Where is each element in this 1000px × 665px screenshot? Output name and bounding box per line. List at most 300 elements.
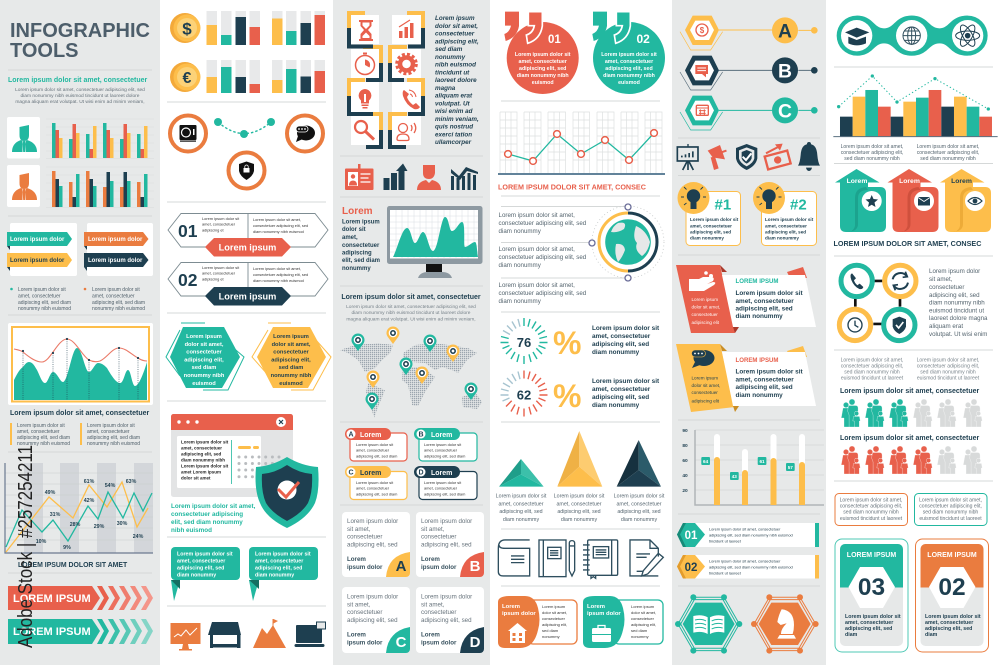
chart heading: Lorem ipsum dolor sit amet, consectetuer xyxy=(10,410,150,417)
arrow card: yellow xyxy=(940,169,991,232)
tip card #1: Lorem ipsum dolor sit xyxy=(690,217,738,222)
vertical bar chart: 40 xyxy=(682,473,688,479)
row A: A xyxy=(778,21,792,42)
tag A xyxy=(345,428,407,461)
text block 2: Lorem ipsum dolor sit amet, xyxy=(498,246,575,253)
pyramid captions: Lorem ipsum dolor sit xyxy=(496,494,546,500)
outlined note: teal xyxy=(914,494,987,526)
hexagon text: yellow: adipiscing elit, xyxy=(271,358,311,364)
letter card D: ipsum dolor xyxy=(421,640,457,646)
text block 1: diam nonummy xyxy=(498,228,542,235)
note text right: nonummy nibh euismod xyxy=(87,441,140,447)
note text left: adipiscing elit, sed diam xyxy=(17,435,70,441)
callout card: orange: ipsum dolor xyxy=(502,611,536,617)
tag A: Lorem xyxy=(360,432,381,439)
monitor side text: dolor sit xyxy=(342,227,366,233)
monitor side text: consectetuer xyxy=(342,243,380,249)
quote circle 02: adipiscing elit, sed xyxy=(605,66,653,72)
letter card D: sit amet, xyxy=(421,602,445,608)
icon: bulb xyxy=(756,187,782,209)
letter card D: adipiscing elit, sed xyxy=(421,617,472,624)
ribbon banner: yellow: dolor sit amet, xyxy=(692,383,720,388)
letter card D: consectetuer xyxy=(421,609,456,616)
icon: shield check xyxy=(893,317,906,334)
step row 01: tincidunt ut laoreet xyxy=(709,538,742,544)
number card 03: adipiscing elit, sed xyxy=(845,626,892,632)
panel: column 1 background xyxy=(0,0,160,665)
callout card: orange: Lorem xyxy=(502,604,520,610)
ribbon: orange: Lorem ipsum dolor xyxy=(88,237,143,243)
ribbon: teal: Lorem ipsum dolor xyxy=(10,237,65,243)
icon: megaphone xyxy=(708,145,727,170)
number card 02: LOREM IPSUM xyxy=(927,552,977,559)
ribbon banner: red: Lorem ipsum xyxy=(692,297,718,302)
letter card D: D xyxy=(470,634,481,651)
icon: hand xyxy=(689,271,715,291)
browser window: amet Lorem ipsum xyxy=(181,470,221,474)
hexagon text: yellow: consectetuer xyxy=(273,350,309,356)
globe with leader lines xyxy=(501,204,664,281)
network text: adipiscing elit, sed xyxy=(929,292,980,299)
letter card C: sit amet, xyxy=(347,602,371,608)
step row 01: Lorem ipsum dolor sit amet, consectetuer xyxy=(709,526,780,532)
icon: book xyxy=(498,540,530,576)
text block 3: consectetuer adipiscing elit, sed xyxy=(498,290,587,297)
red heading: LOREM IPSUM DOLOR SIT AMET, CONSEC xyxy=(498,182,646,192)
icon: red person xyxy=(417,165,441,190)
pyramid captions: amet, consectetuer xyxy=(498,502,544,508)
pyramid captions: diam nonummy xyxy=(621,517,657,523)
ribbon banner: yellow xyxy=(676,344,816,412)
monitor side heading: Lorem xyxy=(342,206,373,217)
map text: diam nonummy nibh euismod tincidunt ut laoreet dolore xyxy=(351,310,471,316)
tag C: C xyxy=(348,470,354,476)
pyramid captions: adipiscing elit, sed xyxy=(617,509,661,515)
icon: navy chart xyxy=(451,167,478,190)
icon circle: lock shield xyxy=(228,152,264,188)
tag B: amet, consectetuer xyxy=(424,448,458,452)
ribbon labels panel xyxy=(7,223,153,276)
letter card D xyxy=(416,587,484,653)
bar gauges row 2 xyxy=(206,60,325,93)
ribbon banner: red xyxy=(676,265,816,333)
circle network xyxy=(839,265,916,341)
quote circle 01: Lorem ipsum dolor sit xyxy=(515,52,571,58)
line chart: 9% xyxy=(63,545,71,551)
tip card #1: diam nonummy xyxy=(690,236,724,240)
bullet text: teal: adipiscing elit, sed diam xyxy=(18,300,71,306)
quote circle 02: euismod xyxy=(618,80,640,86)
outlined note: teal: consectetuer adipiscing elit, xyxy=(919,504,982,510)
step label 01: adipiscing et xyxy=(202,228,225,232)
map text: magna aliquam erat volutpat. Ut wisi enim ad minim veniam, xyxy=(346,316,476,322)
tag D: Lorem ipsum dolor sit xyxy=(424,480,461,485)
step label 02: consectetuer adipiscing elit, sed xyxy=(253,272,308,277)
tip card #2: Lorem ipsum dolor sit xyxy=(765,217,813,222)
family heading 2: Lorem ipsum dolor sit amet, consectetuer xyxy=(840,435,980,442)
tip card #1: adipiscing elit, sed xyxy=(690,230,731,235)
world map with pins xyxy=(340,326,482,418)
tag D: Lorem xyxy=(431,470,452,477)
letter card A: sit amet, xyxy=(347,526,371,533)
speech bubble 1: adipiscing elit, sed xyxy=(177,566,224,572)
browser window: dolor sit amet xyxy=(181,476,211,480)
step label 02: Lorem ipsum xyxy=(219,292,276,302)
stat text 1: Lorem ipsum dolor sit xyxy=(592,325,659,332)
letter card C: Lorem ipsum dolor xyxy=(347,594,398,600)
pyramid: navy xyxy=(617,440,661,487)
letter card C: Lorem xyxy=(347,632,366,638)
ribbon banner: red: LOREM IPSUM xyxy=(736,278,778,285)
navy heading: LOREM IPSUM DOLOR SIT AMET, CONSEC xyxy=(834,239,981,248)
callout card: orange: consectetuer xyxy=(542,616,566,621)
letter card D: Lorem ipsum dolor xyxy=(421,594,472,600)
sunburst 76: 76 xyxy=(517,335,531,350)
tag C: amet, consectetuer xyxy=(356,486,390,490)
panel: column 3 background xyxy=(333,0,490,665)
icon: bars with arrow xyxy=(384,164,408,190)
callout card: teal: adipiscing elit, xyxy=(631,622,656,627)
family pictogram row 2 xyxy=(841,446,982,474)
family heading 1: Lorem ipsum dolor sit amet, consectetuer xyxy=(840,388,980,395)
browser window: diam nonummy nibh xyxy=(181,458,225,462)
callout card: teal: nonummy xyxy=(631,634,649,639)
tip card #1: #1 xyxy=(714,196,731,214)
monitor side text: nonummy xyxy=(342,266,371,272)
outlined note: orange: consectetuer adipiscing elit, xyxy=(840,504,902,510)
icon: document and pen xyxy=(630,540,663,576)
stat text 1: amet, consectetuer xyxy=(592,333,651,340)
sunburst 76 xyxy=(500,318,548,364)
italic paragraph: adipiscing elit, xyxy=(435,38,479,45)
monitor side text: amet, xyxy=(342,235,358,241)
icon: knight xyxy=(777,609,796,639)
ribbon banner: red: Lorem ipsum dolor sit xyxy=(736,290,803,297)
callout card: teal: ipsum dolor xyxy=(587,611,621,617)
icon: chart monitor xyxy=(170,623,200,650)
icon: rising bars xyxy=(399,20,414,38)
tip card #1 xyxy=(678,182,740,246)
bar chart: orange navy teal xyxy=(46,167,154,208)
area chart card xyxy=(8,323,153,405)
note text left: nonummy nibh euismod xyxy=(17,441,70,447)
ribbon: yellow xyxy=(7,253,72,267)
two column text: Lorem ipsum dolor sit amet, xyxy=(841,358,903,364)
icon: graduation cap xyxy=(845,28,869,45)
note text left xyxy=(10,423,70,447)
arrow banner: teal xyxy=(8,619,153,644)
speech bubble 2: adipiscing elit, sed xyxy=(255,566,302,572)
two column text: sed diam nonummy nibh xyxy=(844,370,900,376)
italic paragraph: aliquam erat xyxy=(435,92,473,100)
icon: id card xyxy=(345,164,374,190)
icon: person speaking xyxy=(397,123,416,140)
stat text 2: diam nonummy xyxy=(592,402,640,409)
step label 01: Lorem ipsum xyxy=(219,242,276,252)
line chart: 61% xyxy=(84,479,95,485)
step label 02: adipiscing et xyxy=(202,276,225,282)
hexagon text: teal: nonummy nibh xyxy=(184,373,225,379)
italic paragraph: magna xyxy=(435,85,456,92)
italic paragraph: nibh euismod xyxy=(435,62,476,68)
monitor chart xyxy=(387,206,482,278)
quote circle 02: diam nonummy nibh xyxy=(603,73,655,79)
number card 02: adipiscing elit, sed xyxy=(925,626,972,632)
callout card: teal: consectetuer xyxy=(631,616,655,621)
hex badge: chess knight xyxy=(751,594,819,654)
line chart heading: LOREM IPSUM DOLOR SIT AMET xyxy=(18,562,128,569)
text block 1: consectetuer adipiscing elit, sed xyxy=(498,220,587,227)
tag C: Lorem ipsum dolor sit xyxy=(356,480,393,485)
italic paragraph: dolor sit amet, xyxy=(435,23,478,30)
note text right: amet, consectetuer xyxy=(87,429,130,435)
icon: mountain flag xyxy=(253,619,286,648)
line chart: 31% xyxy=(50,512,61,518)
letter card C: ipsum dolor xyxy=(347,640,383,646)
pyramid captions: diam nonummy xyxy=(503,517,539,523)
letter card A xyxy=(342,512,410,577)
letter card B: adipiscing elit, sed xyxy=(421,542,472,548)
pyramid captions: adipiscing elit, sed xyxy=(499,509,543,515)
ribbon banner: yellow: LOREM IPSUM xyxy=(736,357,778,364)
italic paragraph: quis nostrud xyxy=(435,124,473,130)
network text: volutpat. Ut wisi enim xyxy=(929,331,987,338)
row B: B xyxy=(778,61,792,82)
note text left: amet, consectetuer xyxy=(17,429,60,435)
quote circle 01: 01 xyxy=(548,34,561,46)
ribbon: teal xyxy=(7,232,72,246)
vertical bar chart: 43 xyxy=(732,474,737,479)
step label 01: Lorem ipsum dolor sit xyxy=(202,216,239,221)
pyramid captions: amet, consectetuer xyxy=(556,502,602,508)
title: INFOGRAPHIC xyxy=(10,20,150,42)
letter card C: C xyxy=(396,634,407,651)
note text right: Lorem ipsum dolor sit xyxy=(87,423,135,429)
quote circle 01: adipiscing elit, sed xyxy=(519,66,566,72)
quote circle 02 xyxy=(592,12,665,94)
percent symbol 1: % xyxy=(553,325,581,361)
network text: laoreet dolore magna xyxy=(929,315,988,322)
bullet text: orange: nonummy nibh euismod xyxy=(92,306,145,312)
step row 01: adipiscing elit, sed diam nonummy nibh euismod xyxy=(709,532,793,538)
quote circle 01: amet, consectetuer xyxy=(519,59,567,65)
icon: notebook and pencil xyxy=(539,540,575,577)
stat text 2: Lorem ipsum dolor sit xyxy=(592,378,659,385)
outlined note: orange: euismod tincidunt ut laoreet xyxy=(840,516,903,522)
callout card: teal xyxy=(583,596,663,648)
outline icons row xyxy=(498,540,663,578)
ribbon: orange xyxy=(84,232,148,246)
italic paragraph: laoreet dolore xyxy=(435,77,477,84)
network text: Lorem ipsum dolor xyxy=(929,268,980,275)
stat text 1: diam nonummy xyxy=(592,349,640,356)
bullet text: teal: Lorem ipsum dolor sit xyxy=(18,287,66,293)
ribbon banner: yellow: amet, consectetuer xyxy=(736,376,794,384)
letter card B: ipsum dolor xyxy=(421,564,457,571)
bar chart captions: Lorem ipsum dolor sit amet, xyxy=(917,144,979,150)
pyramids xyxy=(499,431,661,487)
hexagon text: teal: sed diam xyxy=(192,365,216,371)
intro text: magna aliquam erat volutpat. Ut wisi enim ad minim veniam, xyxy=(15,99,145,105)
coin: euro xyxy=(170,62,200,92)
letter card B: Lorem ipsum dolor xyxy=(421,518,472,525)
network text: diam nonummy nibh xyxy=(929,300,985,306)
stock watermark text: Adobe Stock | #257254211 xyxy=(15,445,37,648)
icon: shop xyxy=(208,622,241,648)
note text left: Lorem ipsum dolor sit xyxy=(17,423,65,429)
quote circle 01 xyxy=(504,12,579,94)
vertical bar chart: 90 xyxy=(682,428,688,434)
bar chart captions: Lorem ipsum dolor sit amet, xyxy=(841,144,903,150)
number card 02: diam xyxy=(925,632,938,638)
callout card: orange xyxy=(498,596,577,648)
tag D: adipiscing elit, sed diam xyxy=(424,492,465,496)
quote circle 01: euismod xyxy=(532,80,554,86)
intro text: diam nonummy nibh euismod tincidunt ut laoreet dolore xyxy=(20,93,140,99)
arrow banner: red xyxy=(8,586,153,610)
ribbon: navy xyxy=(84,253,148,267)
letter card B: B xyxy=(470,558,481,575)
map heading: Lorem ipsum dolor sit amet, consectetuer xyxy=(341,294,481,301)
sunburst 62: 62 xyxy=(517,388,531,402)
speech bubble 1: Lorem ipsum dolor sit xyxy=(177,552,233,558)
tag A: A xyxy=(348,432,354,438)
note text right: adipiscing elit, sed diam xyxy=(87,435,140,441)
number card 03: LOREM IPSUM xyxy=(847,552,896,559)
two column text: Lorem ipsum dolor sit amet, xyxy=(917,358,979,364)
italic paragraph: minim veniam, xyxy=(435,116,479,123)
number card 03: amet, consectetuer xyxy=(845,620,893,626)
icon: bulb xyxy=(681,187,706,209)
monitor side text: adipiscing xyxy=(342,250,372,256)
arrow banner: red: LOREM IPSUM xyxy=(13,593,91,605)
callout card: orange: nonummy xyxy=(542,634,560,639)
hexagon text: yellow: Lorem ipsum xyxy=(273,334,309,340)
italic paragraph: volutpat. Ut xyxy=(435,100,471,107)
quote circle 02: 02 xyxy=(636,32,650,46)
bullet text: orange: adipiscing elit, sed diam xyxy=(92,300,145,306)
vertical bar chart: 20 xyxy=(682,488,688,494)
arrow card: red: Lorem xyxy=(899,178,920,185)
bullet text: teal: amet, consectetuer xyxy=(18,294,61,300)
pyramid: yellow xyxy=(557,431,602,487)
two column text: euismod tincidunt ut laoreet xyxy=(917,376,980,382)
monitor side text: Lorem ipsum xyxy=(342,220,380,226)
pyramid captions: Lorem ipsum dolor sit xyxy=(554,494,604,500)
icon: money arrow xyxy=(765,144,791,169)
ribbon banner: red: dolor sit amet, xyxy=(692,304,720,310)
icon: refresh arrows xyxy=(893,272,908,290)
line chart: 28% xyxy=(70,522,81,528)
tag A: amet, consectetuer xyxy=(356,448,390,452)
number card 03: diam xyxy=(845,632,858,638)
letter card D: Lorem xyxy=(421,632,440,638)
line chart: 42% xyxy=(84,498,95,504)
letter card B xyxy=(416,512,484,577)
teal paragraph: nibh euismod xyxy=(171,527,212,534)
number card 02 xyxy=(916,539,988,652)
tag C xyxy=(345,466,407,500)
step row 02: adipiscing elit, sed diam nonummy nibh euismod xyxy=(709,564,793,570)
letter card C: consectetuer xyxy=(347,609,382,616)
letter card A: ipsum dolor xyxy=(347,564,383,571)
network text: consectetuer xyxy=(929,284,964,291)
tip card #2: diam nonummy xyxy=(765,236,799,240)
bullet text: teal xyxy=(10,287,71,312)
outlined note: teal: Lorem ipsum dolor sit amet, xyxy=(919,498,982,504)
tag D: amet, consectetuer xyxy=(424,486,458,490)
letter card A: Lorem ipsum dolor xyxy=(347,518,398,525)
icon: magnifier xyxy=(355,121,374,140)
step label 01: diam nonummy nibh euismod xyxy=(253,229,304,234)
teal paragraph: elit, sed diam nonummy xyxy=(171,519,243,526)
monitor side text: elit, sed diam xyxy=(342,258,380,264)
sunburst 62 xyxy=(500,370,548,416)
family pictogram row 1 xyxy=(841,399,982,427)
teal paragraph: Lorem ipsum dolor sit amet, xyxy=(171,503,255,510)
tip card #2: amet, consectetuer xyxy=(765,223,807,228)
callout card: orange: Lorem ipsum xyxy=(542,604,565,609)
icon circle: safe xyxy=(170,116,206,152)
hexagon text: teal: adipiscing elit, xyxy=(184,358,224,364)
step label 02: amet, consectetuer xyxy=(202,270,236,276)
browser window: Lorem ipsum dolor sit xyxy=(181,464,229,468)
tag B: adipiscing elit, sed diam xyxy=(424,454,465,458)
dotted connector xyxy=(214,118,275,138)
bar chart captions: sed diam nonummy nibh xyxy=(844,156,900,162)
callout card: orange: adipiscing elit, xyxy=(542,622,567,627)
vertical bar chart: 57 xyxy=(788,465,793,470)
quote circle 01: diam nonummy nibh xyxy=(517,73,569,79)
icon: gear xyxy=(397,54,416,74)
hexagon text: yellow: nonummy nibh xyxy=(271,373,312,379)
two column text: euismod tincidunt ut laoreet xyxy=(841,376,904,382)
pyramid: teal xyxy=(499,459,544,487)
step row 02: Lorem ipsum dolor sit amet, consectetuer xyxy=(709,558,780,564)
arrow card: teal: Lorem xyxy=(847,178,867,185)
quote circle 02: Lorem ipsum dolor sit xyxy=(601,52,657,58)
tip card #1: amet, consectetuer xyxy=(690,223,732,228)
italic paragraph: sed diam xyxy=(435,46,463,53)
bullet text: orange xyxy=(84,287,145,312)
two column text: consectetuer adipiscing elit, xyxy=(841,364,903,370)
bar chart captions: sed diam nonummy nibh xyxy=(920,156,976,162)
line chart: 63% xyxy=(126,479,137,485)
bar chart: teal red yellow xyxy=(46,119,154,158)
step label 02 xyxy=(168,262,328,306)
step label 01 xyxy=(168,214,328,256)
bar gauges row 1 xyxy=(206,11,325,45)
italic paragraph: wisi enim ad xyxy=(435,108,473,115)
callout card: teal: sed diam xyxy=(631,628,648,633)
line chart xyxy=(5,463,153,553)
number card 02: Lorem ipsum dolor sit xyxy=(925,614,981,620)
tip card #2 xyxy=(753,182,816,246)
hexagon text: teal: dolor sit amet, xyxy=(185,342,224,348)
map text: Lorem ipsum dolor sit amet, consectetuer adipiscing elit, sed xyxy=(346,305,476,310)
text block 2: consectetuer adipiscing elit, sed xyxy=(498,254,587,261)
line chart with grid columns xyxy=(498,112,665,174)
icon: bell xyxy=(798,142,820,171)
stat text 2: amet, consectetuer xyxy=(592,386,651,393)
step label 01: amet, consectetuer xyxy=(202,222,236,226)
icon: hourglass xyxy=(359,20,373,41)
hexagon text: yellow: dolor sit amet, xyxy=(272,342,311,348)
ribbon banner: yellow: Lorem ipsum dolor sit xyxy=(736,368,803,376)
ribbon banner: red: adipiscing elit, sed xyxy=(736,306,793,312)
ribbon banner: yellow: diam nonummy xyxy=(736,392,783,399)
callout card: orange: sed diam xyxy=(542,628,559,633)
